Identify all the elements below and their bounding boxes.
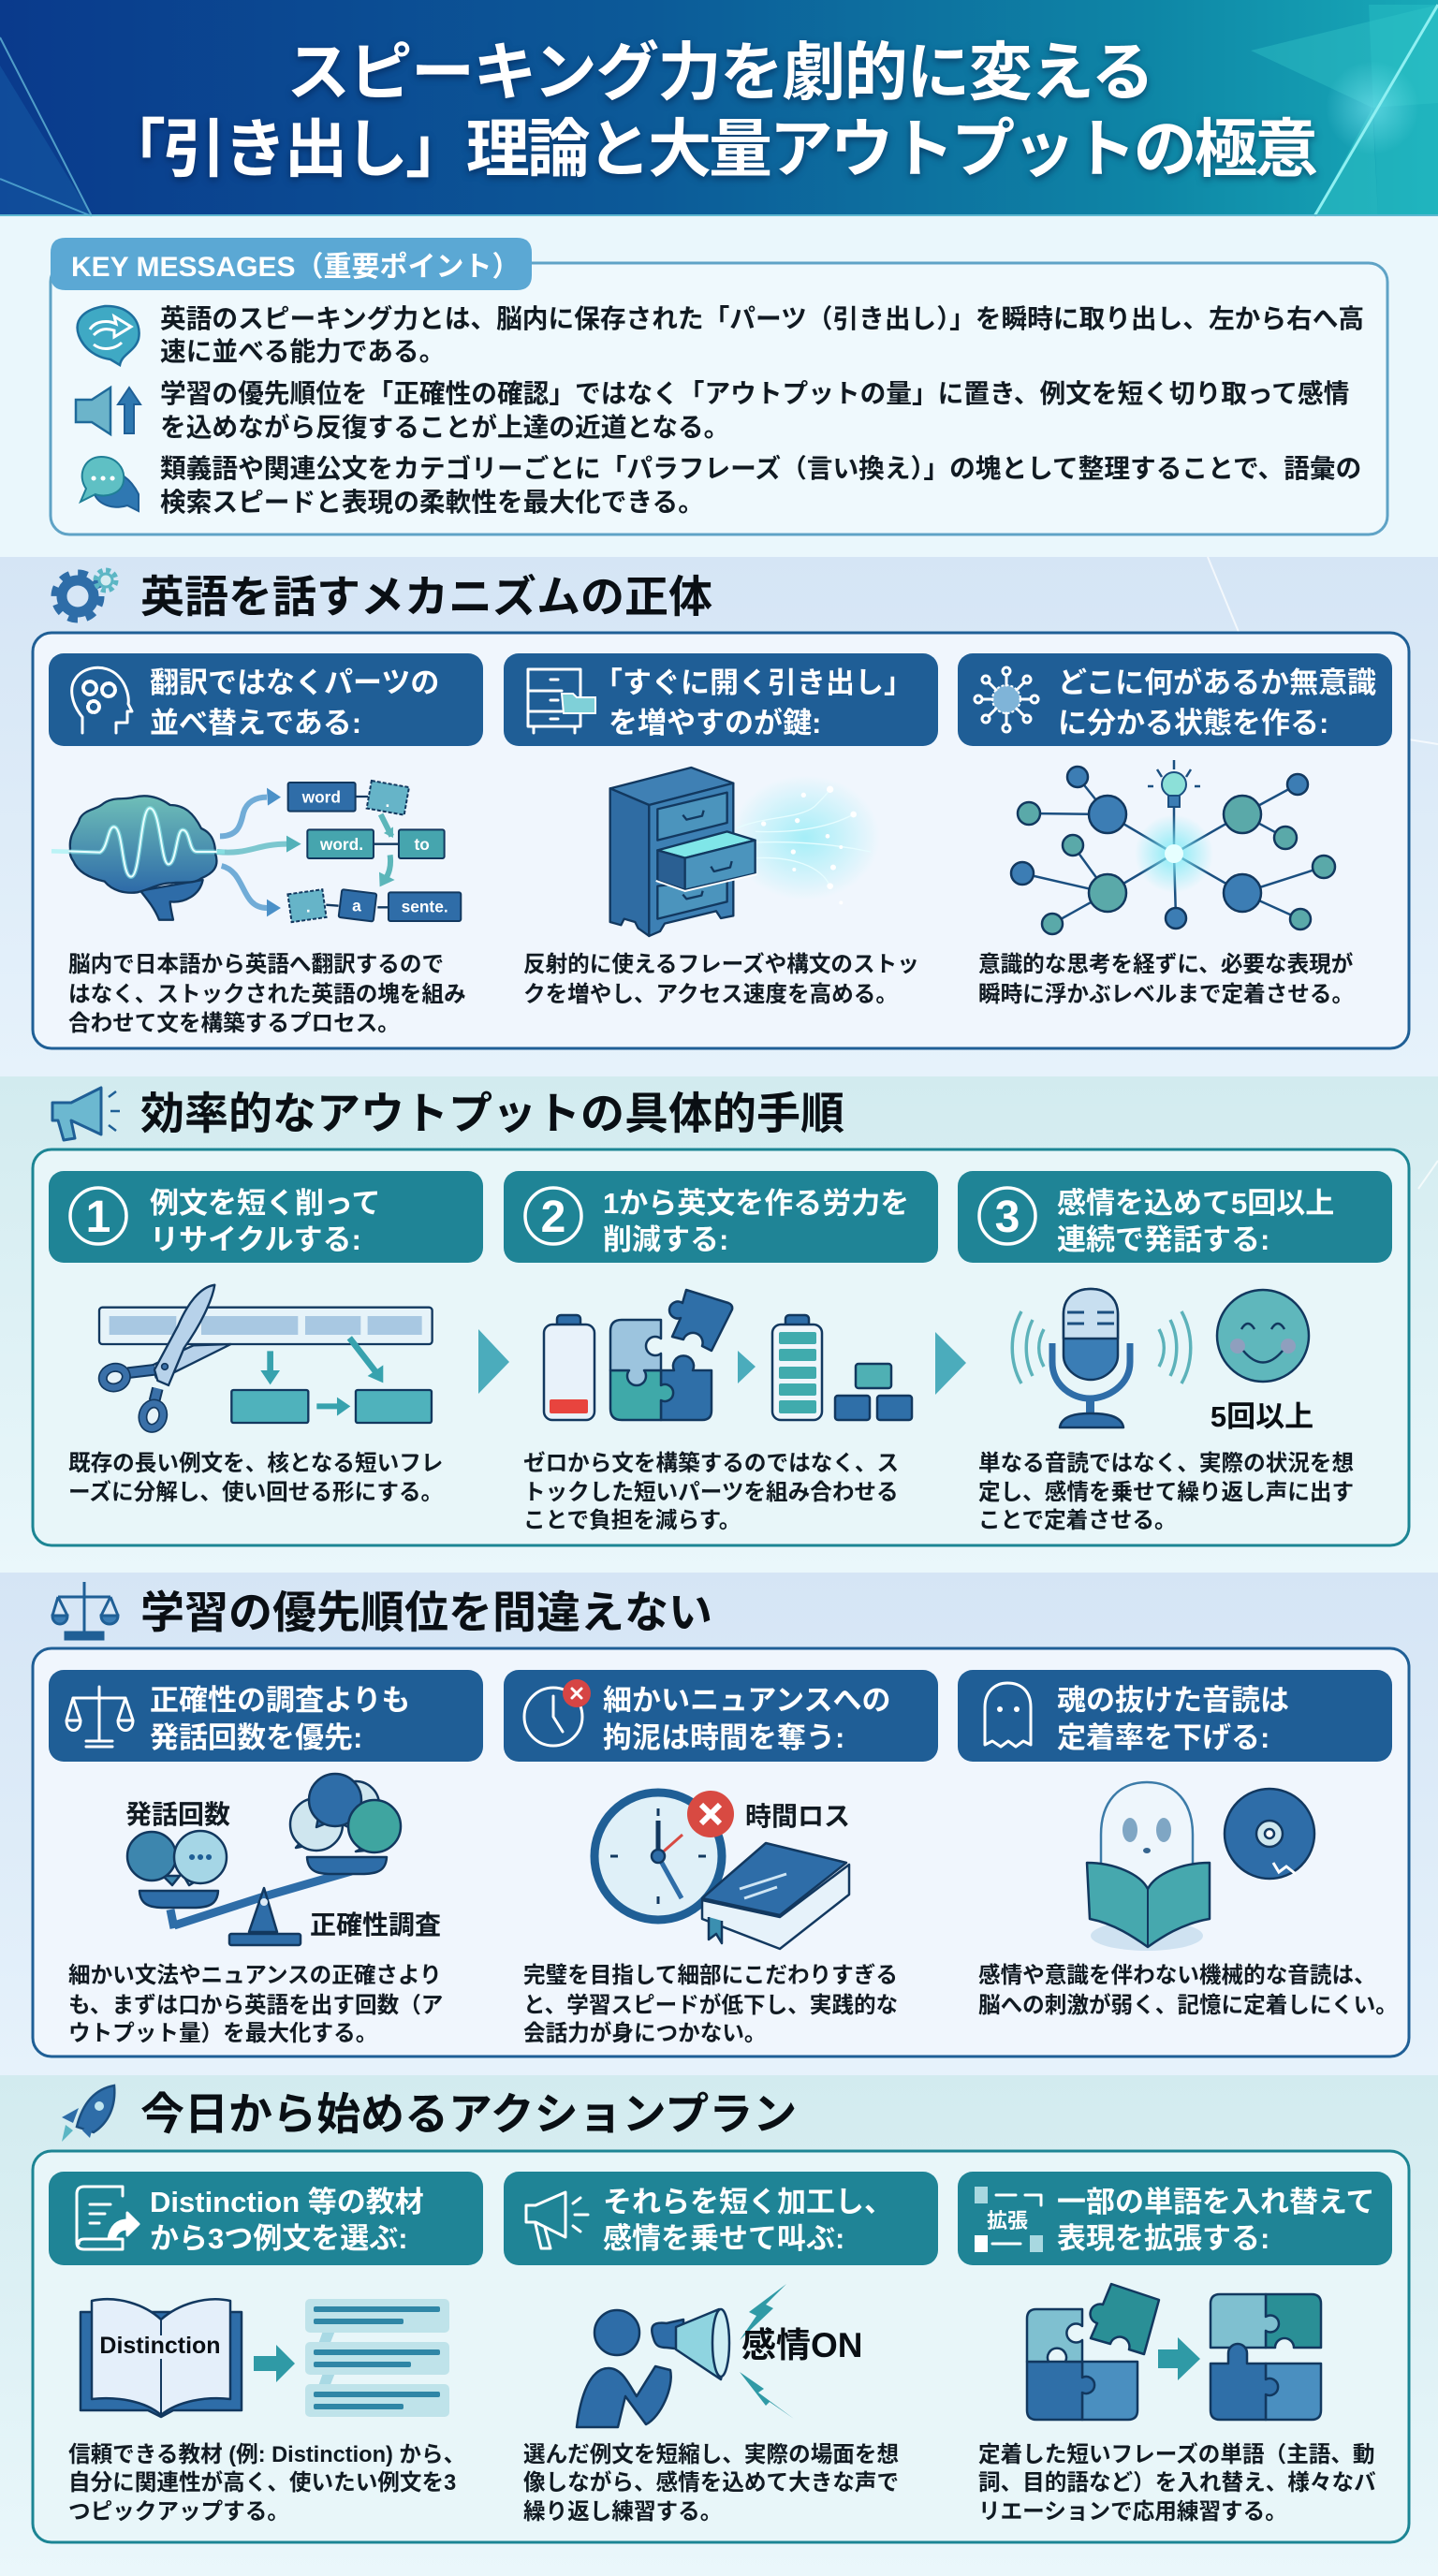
card header 3: 定着率を下げる: bbox=[1057, 1721, 1269, 1754]
text 1: 既存の長い例文を、核となる短いフレ bbox=[68, 1452, 443, 1476]
illustration: book and example sentences: Distinction bbox=[99, 2333, 221, 2359]
illustration: brain to word blocks: a bbox=[352, 896, 361, 915]
card header 2: 削減する: bbox=[603, 1223, 728, 1256]
icon: ghost bbox=[985, 1683, 1031, 1747]
card header 1: 翻訳ではなくパーツの bbox=[150, 666, 439, 699]
card header 2: 拘泥は時間を奪う: bbox=[603, 1721, 844, 1754]
text 2: 反射的に使えるフレーズや構文のストッ bbox=[523, 953, 919, 977]
illustration: microphone bbox=[1012, 1289, 1191, 1427]
arrow 2 bbox=[738, 1351, 756, 1383]
icon: cabinet and folder bbox=[528, 669, 595, 733]
panel: key messages bbox=[51, 238, 1387, 534]
card header 1: から3つ例文を選ぶ: bbox=[150, 2222, 408, 2255]
card header 2: 感情を乗せて叫ぶ: bbox=[603, 2222, 844, 2255]
illustration: brain to word blocks: word bbox=[301, 787, 341, 806]
text 2: 会話力が身につかない。 bbox=[523, 2020, 767, 2046]
text 3: ことで定着させる。 bbox=[978, 1508, 1177, 1533]
text 2: 像しながら、感情を込めて大きな声で bbox=[523, 2469, 899, 2496]
card header 3: に分かる状態を作る: bbox=[1058, 707, 1328, 739]
text 3: 意識的な思考を経ずに、必要な表現が bbox=[978, 953, 1353, 977]
illustration: brain to word blocks bbox=[51, 781, 461, 922]
key messages tab bbox=[51, 238, 532, 290]
label: emotion on: 感情ON bbox=[741, 2326, 863, 2364]
text 3: 定し、感情を乗せて繰り返し声に出す bbox=[978, 1480, 1354, 1505]
card header 2: 1から英文を作る労力を bbox=[603, 1187, 909, 1220]
illustration: scissors cutting sentence bbox=[99, 1285, 433, 1430]
card header 3 bbox=[958, 1171, 1392, 1263]
card header 2: 2 bbox=[541, 1193, 565, 1242]
text 1: ウトプット量）を最大化する。 bbox=[68, 2021, 377, 2046]
key message 3: 検索スピードと表現の柔軟性を最大化できる。 bbox=[160, 488, 704, 517]
icon: network brain bbox=[975, 667, 1038, 732]
text 1: も、まずは口から英語を出す回数（ア bbox=[68, 1993, 443, 2018]
title: 「引き出し」理論と大量アウトプットの極意 bbox=[102, 114, 1317, 185]
title: スピーキング力を劇的に変える bbox=[286, 37, 1153, 109]
title bbox=[102, 37, 1317, 185]
text 3: 詞、目的語など）を入れ替え、様々なバ bbox=[978, 2470, 1376, 2496]
text 1: 信頼できる教材 (例: Distinction) から、 bbox=[68, 2443, 465, 2467]
card header 3: 3 bbox=[995, 1193, 1020, 1242]
panel: priorities bbox=[33, 1648, 1409, 2056]
illustration: smiley face bbox=[1217, 1290, 1309, 1382]
illustration: brain to word blocks: . bbox=[386, 792, 389, 811]
text 1: つピックアップする。 bbox=[68, 2499, 289, 2525]
key message 1: 英語のスピーキング力とは、脳内に保存された「パーツ（引き出し）」を瞬時に取り出し、左から右へ高 bbox=[160, 304, 1364, 333]
icon: book with arrow bbox=[77, 2187, 139, 2249]
card header 3 bbox=[958, 1670, 1392, 1762]
text 1: 自分に関連性が高く、使いたい例文を3 bbox=[68, 2469, 456, 2496]
text 1: ーズに分解し、使い回せる形にする。 bbox=[68, 1479, 443, 1505]
card header 3: 魂の抜けた音読は bbox=[1057, 1684, 1289, 1717]
illustration: clock, x and book bbox=[594, 1791, 849, 1949]
illustration: person shouting into megaphone bbox=[577, 2284, 794, 2427]
panel: mechanism bbox=[33, 633, 1409, 1048]
text 2: ゼロから文を構築するのではなく、ス bbox=[523, 1452, 899, 1476]
card header 2 bbox=[504, 1670, 938, 1762]
heading: action plan: 今日から始めるアクションプラン bbox=[140, 2089, 797, 2139]
label: time loss: 時間ロス bbox=[745, 1802, 850, 1831]
heading: priorities: 学習の優先順位を間違えない bbox=[140, 1588, 712, 1637]
card header 1: 正確性の調査よりも bbox=[150, 1684, 410, 1717]
card header 3: 表現を拡張する: bbox=[1057, 2222, 1269, 2255]
arrow 3 bbox=[935, 1332, 966, 1395]
icon: expand swap: 拡張 bbox=[987, 2209, 1028, 2232]
card header 1 bbox=[49, 1670, 483, 1762]
illustration: brain to word blocks: . bbox=[306, 898, 311, 916]
text 3: 脳への刺激が弱く、記憶に定着しにくい。 bbox=[978, 1992, 1398, 2018]
header banner bbox=[0, 0, 1438, 216]
card header 3 bbox=[958, 2172, 1392, 2265]
text 1: はなく、ストックされた英語の塊を組み bbox=[68, 982, 466, 1007]
illustration: balance of speech count and accuracy bbox=[127, 1774, 401, 1945]
text 2: と、学習スピードが低下し、実践的な bbox=[523, 1992, 898, 2018]
card header 1 bbox=[49, 1171, 483, 1263]
text 2: トックした短いパーツを組み合わせる bbox=[523, 1480, 899, 1505]
illustration: ghost reading and disc bbox=[1087, 1782, 1314, 1951]
card header 3 bbox=[958, 653, 1392, 746]
icon: megaphone bbox=[526, 2192, 588, 2248]
illustration: battery low and puzzle bbox=[544, 1290, 732, 1420]
card header 1 bbox=[49, 653, 483, 746]
key message 3: 類義語や関連公文をカテゴリーごとに「パラフレーズ（言い換え）」の塊として整理することで、語彙の bbox=[160, 454, 1361, 483]
icon: head with gears bbox=[72, 667, 132, 733]
heading: mechanism: 英語を話すメカニズムの正体 bbox=[140, 572, 712, 622]
illustration: brain to word blocks: word. bbox=[319, 835, 363, 854]
heading: procedure: 効率的なアウトプットの具体的手順 bbox=[140, 1089, 844, 1138]
card header 1: 1 bbox=[86, 1193, 110, 1242]
label: speech count: 発話回数 bbox=[125, 1800, 230, 1829]
card header 2: 細かいニュアンスへの bbox=[603, 1684, 891, 1717]
key message 2: を込めながら反復することが上達の近道となる。 bbox=[160, 413, 729, 442]
icon: megaphone bbox=[52, 1088, 120, 1140]
illustration: cabinet with open drawer bbox=[610, 768, 880, 936]
card header 3: どこに何があるか無意識 bbox=[1058, 666, 1376, 699]
illustration: battery full and blocks bbox=[772, 1315, 912, 1420]
card header 1 bbox=[49, 2172, 483, 2265]
illustration: network with lightbulb bbox=[1011, 760, 1335, 934]
key messages tab: KEY MESSAGES（重要ポイント） bbox=[71, 252, 521, 283]
text 1: 合わせて文を構築するプロセス。 bbox=[68, 1011, 400, 1036]
arrow 1 bbox=[478, 1329, 509, 1394]
card header 1: Distinction 等の教材 bbox=[150, 2186, 424, 2218]
icon: brain with arrow bbox=[78, 306, 139, 365]
illustration: brain to word blocks: sente. bbox=[402, 898, 448, 916]
text 3: 定着した短いフレーズの単語（主語、動 bbox=[978, 2443, 1375, 2467]
text 2: 完璧を目指して細部にこだわりすぎる bbox=[523, 1964, 898, 1988]
illustration: puzzle pieces swap bbox=[1027, 2284, 1321, 2420]
icon: expand swap bbox=[975, 2187, 1043, 2252]
text 2: 選んだ例文を短縮し、実際の場面を想 bbox=[523, 2443, 899, 2467]
illustration: brain to word blocks: to bbox=[414, 835, 430, 854]
text 2: クを増やし、アクセス速度を高める。 bbox=[523, 982, 898, 1007]
text 3: リエーションで応用練習する。 bbox=[978, 2499, 1287, 2525]
card header 3: 一部の単語を入れ替えて bbox=[1057, 2186, 1374, 2218]
card header 2 bbox=[504, 653, 938, 746]
icon: chat bubbles bbox=[81, 457, 139, 511]
icon: clock with x bbox=[524, 1679, 591, 1746]
text 1: 細かい文法やニュアンスの正確さより bbox=[68, 1964, 442, 1988]
icon: rocket bbox=[62, 2086, 114, 2142]
card header 2: を増やすのが鍵: bbox=[609, 707, 821, 739]
label: 5 times: 5回以上 bbox=[1211, 1400, 1313, 1433]
text 2: ことで負担を減らす。 bbox=[523, 1508, 741, 1533]
label: accuracy research: 正確性調査 bbox=[310, 1910, 441, 1939]
panel: procedure bbox=[33, 1149, 1409, 1545]
text 1: 脳内で日本語から英語へ翻訳するので bbox=[68, 953, 444, 977]
panel: action plan bbox=[33, 2151, 1409, 2542]
card header 2: それらを短く加工し、 bbox=[603, 2186, 893, 2218]
card header 1: リサイクルする: bbox=[150, 1223, 361, 1256]
card header 1: 発話回数を優先: bbox=[150, 1721, 362, 1754]
icon: speaker and up arrow bbox=[76, 388, 140, 434]
card header 2: 「すぐに開く引き出し」 bbox=[594, 666, 913, 699]
text 3: 瞬時に浮かぶレベルまで定着させる。 bbox=[978, 982, 1354, 1007]
card header 2 bbox=[504, 1171, 938, 1263]
text 3: 単なる音読ではなく、実際の状況を想 bbox=[978, 1452, 1354, 1476]
illustration: book and example sentences bbox=[81, 2299, 449, 2417]
text 3: 感情や意識を伴わない機械的な音読は、 bbox=[978, 1964, 1376, 1988]
icon: scales bbox=[52, 1582, 118, 1639]
card header 2 bbox=[504, 2172, 938, 2265]
card header 1: 並べ替えである: bbox=[150, 707, 361, 739]
card header 1: 例文を短く削って bbox=[150, 1187, 380, 1220]
card header 3: 感情を込めて5回以上 bbox=[1057, 1187, 1334, 1220]
card header 3: 連続で発話する: bbox=[1057, 1223, 1269, 1256]
icon: scales bbox=[66, 1687, 133, 1747]
icon: gears bbox=[55, 570, 116, 619]
text 2: 繰り返し練習する。 bbox=[523, 2499, 722, 2525]
key message 1: 速に並べる能力である。 bbox=[160, 337, 445, 366]
key message 2: 学習の優先順位を「正確性の確認」ではなく「アウトプットの量」に置き、例文を短く切り取って感情 bbox=[160, 379, 1349, 408]
